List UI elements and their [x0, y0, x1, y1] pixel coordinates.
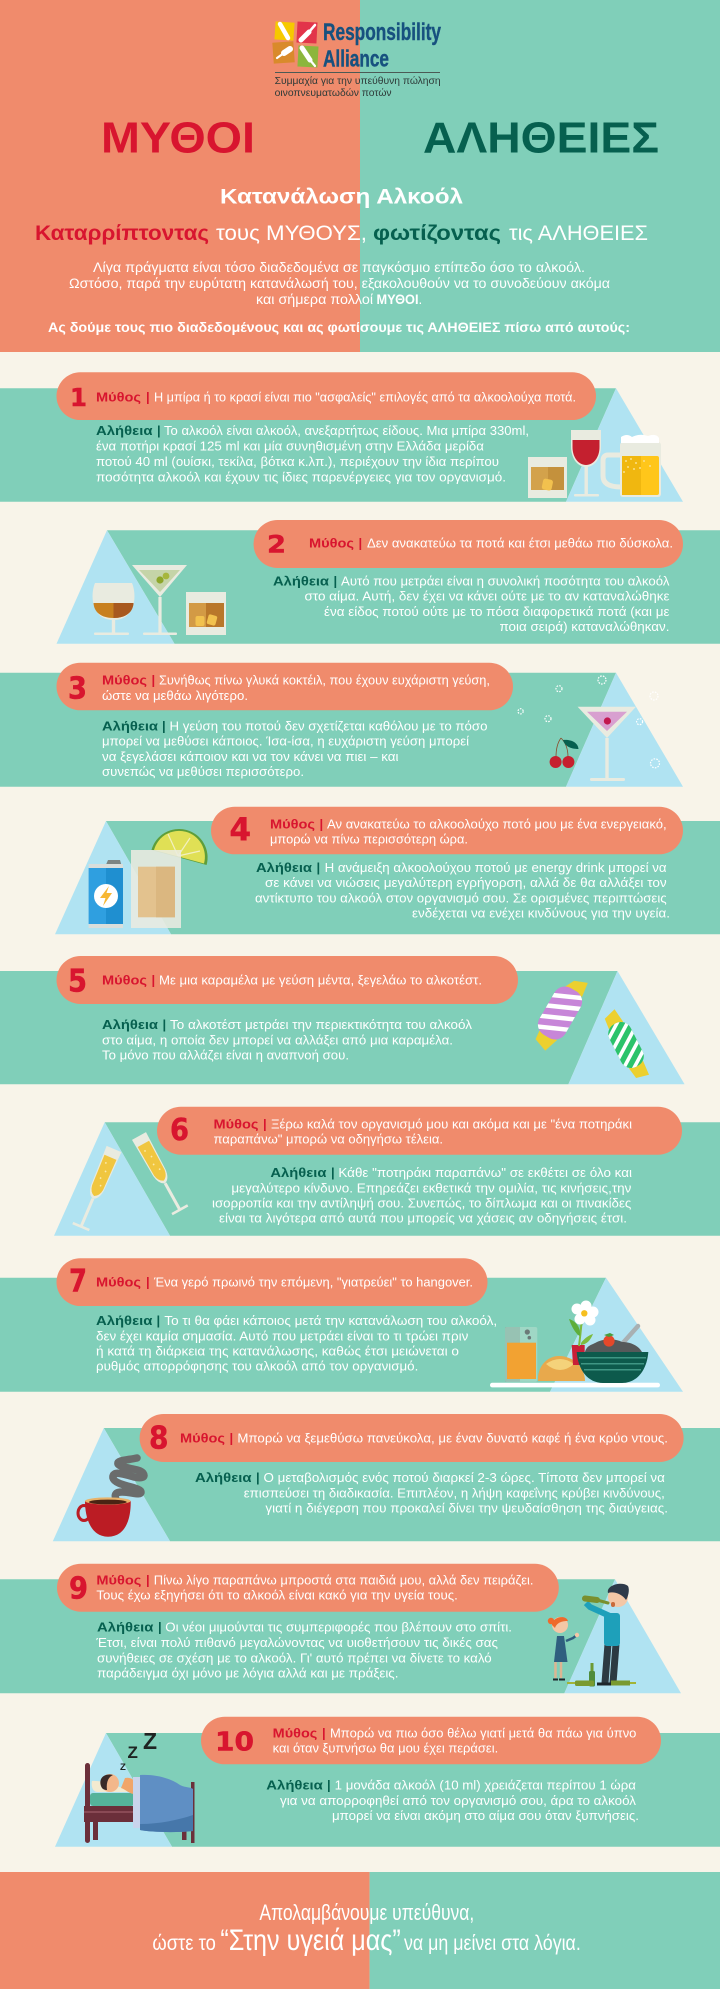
icon: right champagne flute — [131, 1132, 188, 1215]
truth text: δεν έχει καμία σημασία. Αυτό που μετράει είναι το τι τρώει πριν — [96, 1329, 468, 1343]
truth text — [96, 1313, 497, 1374]
myth text — [102, 673, 490, 703]
myth text: Μύθος — [96, 1275, 141, 1290]
truth text — [195, 1470, 668, 1515]
panel: myth 2 — [56, 520, 720, 644]
icon: coffee cup — [78, 1458, 144, 1537]
myth text: Μύθος — [180, 1431, 225, 1446]
intro paragraph: Ωστόσο, παρά την ευρύτατη κατανάλωσή του, εξακολουθούν να το συνοδεύουν ακόμα — [69, 276, 610, 291]
truth text: Αλήθεια — [273, 573, 329, 588]
panel: myth 4 — [55, 807, 720, 934]
myth text: | — [146, 1573, 150, 1588]
truth text: ένα ποτήρι κρασί 125 ml και μία συνηθισμένη στην Ελλάδα μερίδα — [96, 440, 484, 454]
myth text: μπορώ να πίνω περισσότερη ώρα. — [270, 833, 468, 847]
myth text: Μύθος — [96, 390, 141, 405]
truth text: ποτού 40 ml (ουίσκι, τεκίλα, βότκα κ.λπ.), περιέχουν την ίδια περίπου — [96, 455, 499, 469]
truth text: σε κάνει να νιώσεις μεγαλύτερη εγρήγορση, αλλά δε θα αλλάξει τον — [265, 876, 667, 890]
closing message — [152, 1900, 581, 1957]
myth text: Συνήθως πίνω γλυκά κοκτέιλ, που έχουν ευχάριστη γεύση, — [159, 674, 490, 688]
logo: Alliance — [323, 46, 389, 72]
myth text: Μύθος — [214, 1117, 259, 1132]
icon: person sleeping in bed — [84, 1728, 194, 1843]
panel: myth 6 — [54, 1107, 720, 1236]
truth text: | — [334, 573, 337, 588]
truth text: Έτσι, είναι πολύ πιθανό μεγαλώνοντας να υιοθετήσουν τις δικές σας — [95, 1636, 498, 1650]
truth text: ποια σειρά) καταναλώθηκαν. — [500, 620, 670, 634]
intro paragraph: . — [418, 292, 422, 307]
heading: truths: ΑΛΗΘΕΙΕΣ — [423, 114, 659, 163]
truth text — [95, 1620, 512, 1680]
myth text: Μπορώ να ξεμεθύσω πανεύκολα, με έναν δυνατό καφέ ή ένα κρύο ντους. — [237, 1432, 668, 1446]
myth text: Μύθος — [273, 1726, 318, 1741]
truth text: ποσότητα αλκοόλ και έχουν τις ίδιες παρενέργειες για τον οργανισμό. — [96, 470, 506, 484]
myth text: | — [358, 536, 362, 551]
truth text — [255, 860, 670, 920]
myth text: Η μπίρα ή το κρασί είναι πιο "ασφαλείς" επιλογές από τα αλκοολούχα ποτά. — [154, 391, 576, 405]
myth text: Πίνω λίγο παραπάνω μπροστά στα παιδιά μου, αλλά δεν πειράζει. — [154, 1574, 534, 1588]
myth text: Μύθος — [102, 673, 147, 688]
truth text: | — [316, 860, 320, 875]
truth text: Το αλκοτέστ μετράει την περιεκτικότητα του αλκοόλ — [170, 1018, 473, 1032]
sleep Z letters: Z — [120, 1762, 126, 1773]
truth text: Η ανάμειξη αλκοολούχου ποτού με energy drink μπορεί να — [325, 861, 667, 875]
panel: myth 9 — [0, 1564, 681, 1693]
myth text: Αν ανακατεύω το αλκοολούχο ποτό μου με ένα ενεργειακό, — [327, 818, 667, 832]
myth text — [96, 1573, 534, 1603]
number 7: 7 — [69, 1264, 87, 1300]
truth text: Αλήθεια — [102, 1017, 158, 1032]
truth text: Αλήθεια — [96, 423, 153, 438]
myth text: Ένα γερό πρωινό την επόμενη, "γιατρεύει" το hangover. — [153, 1276, 473, 1290]
icon: left champagne flute — [72, 1145, 122, 1231]
icon: energy drink and glass — [89, 829, 208, 928]
truth text: για να απορροφηθεί από τον οργανισμό σου, άρα το αλκοόλ — [280, 1794, 637, 1808]
panel: myth 10 — [55, 1717, 720, 1847]
number 3: 3 — [68, 672, 87, 707]
subtitle: Κατανάλωση Αλκοόλ — [220, 185, 463, 208]
truth text: συνήθειες σε σχέση με το αλκοόλ. Γι' αυτό πρέπει να δίνετε το καλό — [97, 1651, 492, 1665]
icon: green candy — [604, 1009, 649, 1078]
myth text — [273, 1726, 636, 1756]
myth text: Μύθος — [96, 1573, 142, 1588]
icon: cocktail and cherries — [518, 676, 660, 781]
truth text: | — [327, 1778, 331, 1793]
myth text: και όταν ξυπνήσω θα μου έχει περάσει. — [273, 1742, 498, 1756]
truth text: Αλήθεια — [256, 860, 312, 875]
myth text: | — [146, 390, 150, 405]
truth text: μπορεί να μεθύσει κάποιος. Ίσα-ίσα, η ευχάριστη γεύση μπορεί — [102, 735, 469, 749]
myth text: | — [152, 673, 155, 688]
closing message: ώστε το — [152, 1932, 216, 1955]
tagline: φωτίζοντας — [373, 222, 501, 245]
truth text: ισορροπία και την αντίληψή σου. Συνεπώς, το δίπλωμα και οι πινακίδες — [212, 1196, 631, 1210]
myth text: Μπορώ να πιω όσο θέλω γιατί μετά θα πάω για ύπνο — [330, 1727, 636, 1741]
number 5: 5 — [68, 964, 87, 1000]
truth text: Αλήθεια — [102, 718, 158, 733]
number 6: 6 — [170, 1113, 189, 1148]
myth text: παραπάνω" μπορώ να οδηγήσω τέλεια. — [214, 1133, 443, 1147]
heading: myths: ΜΥΘΟΙ — [101, 114, 255, 163]
closing message: Απολαμβάνουμε υπεύθυνα, — [259, 1900, 474, 1925]
logo — [272, 19, 441, 99]
truth text: Οι νέοι μιμούνται τις συμπεριφορές που βλέπουν στο σπίτι. — [165, 1621, 512, 1635]
sleep Z letters: Z — [143, 1728, 157, 1754]
panel: myth 8 — [53, 1414, 720, 1541]
truth text: ρυθμός απορρόφησης του αλκοόλ από τον οργανισμό. — [96, 1360, 418, 1374]
truth text: στο αίμα, η οποία δεν μπορεί να αλλάξει από μια καραμέλα. — [102, 1033, 453, 1047]
logo: Responsibility — [323, 19, 441, 46]
number 8: 8 — [149, 1421, 168, 1457]
myth text — [214, 1117, 632, 1147]
logo: οινοπνευματωδών ποτών — [275, 87, 392, 99]
sleep Z letters — [120, 1728, 157, 1773]
tagline: τους ΜΥΘΟΥΣ, — [216, 222, 367, 245]
truth text — [212, 1165, 632, 1226]
truth text: στο αίμα. Αυτή, δεν έχει να κάνει ούτε με το αν καταναλώθηκε — [304, 590, 670, 604]
number 1: 1 — [70, 383, 87, 412]
truth text: | — [158, 1620, 162, 1635]
myth text: Τους έχω εξηγήσει ότι το αλκοόλ είναι κακό για την υγεία τους. — [96, 1589, 458, 1603]
myth text: Δεν ανακατεύω τα ποτά και έτσι μεθάω πιο δύσκολα. — [367, 537, 673, 551]
myth text: | — [263, 1117, 267, 1132]
myth text: | — [152, 972, 155, 987]
truth text: να ξεγελάσει κάποιον και να τον κάνει να πιει – και — [102, 750, 399, 764]
truth text: | — [157, 423, 161, 438]
truth text: | — [162, 718, 166, 733]
closing message: να μη μείνει στα λόγια. — [404, 1932, 581, 1955]
number 9: 9 — [69, 1571, 88, 1606]
tagline: τις ΑΛΗΘΕΙΕΣ — [509, 222, 648, 245]
truth text: Αλήθεια — [195, 1470, 252, 1485]
number 2: 2 — [267, 530, 286, 558]
truth text: Κάθε "ποτηράκι παραπάνω" σε εκθέτει σε όλο και — [338, 1166, 632, 1180]
icon: breakfast — [490, 1300, 660, 1387]
panel: myth 3 — [0, 663, 683, 787]
truth text — [266, 1778, 639, 1823]
myth text: | — [146, 1275, 150, 1290]
myth text: Μύθος — [270, 817, 315, 832]
truth text — [273, 573, 670, 634]
sleep Z letters: Z — [128, 1743, 138, 1762]
truth text: | — [331, 1165, 335, 1180]
truth text: Το αλκοόλ είναι αλκοόλ, ανεξαρτήτως είδους. Μια μπίρα 330ml, — [164, 424, 529, 438]
truth text: Αλήθεια — [266, 1778, 323, 1793]
myth text: Ξέρω καλά τον οργανισμό μου και ακόμα και με "ένα ποτηράκι — [271, 1118, 632, 1132]
footer panel — [0, 1872, 720, 1989]
truth text: μπορεί να είναι ακόμη στο αίμα σου όταν ξυπνήσεις. — [332, 1809, 639, 1823]
truth text: Αυτό που μετράει είναι η συνολική ποσότητα του αλκοόλ — [341, 574, 670, 588]
number 4: 4 — [230, 812, 251, 848]
logo: Συμμαχία για την υπεύθυνη πώληση — [275, 75, 441, 87]
panel: myth 1 — [0, 372, 683, 502]
truth text: Αλήθεια — [97, 1620, 153, 1635]
intro paragraph: Λίγα πράγματα είναι τόσο διαδεδομένα σε παγκόσμιο επίπεδο όσο το αλκοόλ. — [93, 260, 585, 275]
truth text: Η γεύση του ποτού δεν σχετίζεται καθόλου με το πόσο — [170, 719, 488, 733]
myth text: | — [322, 1726, 326, 1741]
truth text: ένα είδος ποτού ούτε με το πόσα διαφορετικά ποτά (και με — [324, 605, 670, 619]
truth text: είναι τα λιγότερα από αυτά που μπορείς να χάσεις αν οδηγήσεις έτσι. — [219, 1212, 627, 1226]
icon: father drinking and child — [548, 1584, 636, 1686]
truth text: αντίκτυπο του αλκοόλ στον οργανισμό σου. Σε ορισμένες περιπτώσεις — [255, 891, 667, 905]
intro paragraph: ΜΥΘΟΙ — [376, 292, 418, 307]
truth text — [96, 423, 529, 484]
myth text: Με μια καραμέλα με γεύση μέντα, ξεγελάω το αλκοτέστ. — [159, 973, 482, 987]
intro call to action: Ας δούμε τους πιο διαδεδομένους και ας φωτίσουμε τις ΑΛΗΘΕΙΕΣ πίσω από αυτούς: — [48, 320, 630, 335]
truth text: μεγαλύτερο κίνδυνο. Επηρεάζει εκθετικά την ομιλία, τις κινήσεις,την — [231, 1181, 631, 1195]
truth text: | — [156, 1313, 160, 1328]
icon: brandy, martini and whisky — [93, 565, 226, 635]
truth text — [102, 718, 488, 779]
closing message: “Στην υγειά μας” — [220, 1924, 401, 1957]
truth text: Το μόνο που αλλάζει είναι η αναπνοή σου. — [102, 1048, 349, 1062]
myth text: ώστε να μεθάω λιγότερο. — [102, 689, 248, 703]
panel: myth 5 — [0, 956, 685, 1086]
intro paragraph: και σήμερα πολλοί — [256, 292, 373, 307]
truth text: επισπεύσει τη διαδικασία. Επιπλέον, η λήψη καφεΐνης κρύβει κινδύνους, — [244, 1486, 665, 1500]
panel: myth 7 — [0, 1258, 683, 1392]
tagline: Καταρρίπτοντας — [35, 222, 209, 245]
myth text — [270, 817, 667, 847]
truth text: συνεπώς να μεθύσει περισσότερο. — [102, 765, 304, 779]
myth text: Μύθος — [102, 972, 147, 987]
myth text: | — [320, 817, 323, 832]
myth text: Μύθος — [309, 536, 354, 551]
number 10: 10 — [215, 1728, 254, 1758]
truth text: ή κατά τη διάρκεια της κατανάλωσης, καθώς έτσι μειώνεται ο — [96, 1345, 459, 1359]
icon: whisky, wine and beer — [528, 430, 661, 498]
truth text: παράδειγμα όχι μόνο με λόγια αλλά και με πράξεις. — [97, 1666, 398, 1680]
icon: purple candy — [536, 980, 588, 1051]
truth text: Ο μεταβολισμός ενός ποτού διαρκεί 2-3 ώρες. Τίποτα δεν μπορεί να — [264, 1471, 665, 1485]
truth text — [102, 1017, 473, 1062]
truth text: Το τι θα φάει κάποιος μετά την κατανάλωση του αλκοόλ, — [164, 1314, 497, 1328]
truth text: Αλήθεια — [270, 1165, 326, 1180]
truth text: | — [162, 1017, 166, 1032]
myth text: | — [230, 1431, 233, 1446]
tagline — [35, 222, 648, 245]
truth text: | — [256, 1470, 260, 1485]
intro paragraph — [69, 260, 610, 307]
truth text: γιατί η διέγερση που προκαλεί δίνει την ψευδαίσθηση της διαύγειας. — [265, 1501, 668, 1515]
header panel — [0, 0, 720, 352]
truth text: 1 μονάδα αλκοόλ (10 ml) χρειάζεται περίπου 1 ώρα — [335, 1779, 636, 1793]
truth text: Αλήθεια — [96, 1313, 152, 1328]
truth text: ενδέχεται να ενέχει κινδύνους για την υγεία. — [412, 906, 670, 920]
